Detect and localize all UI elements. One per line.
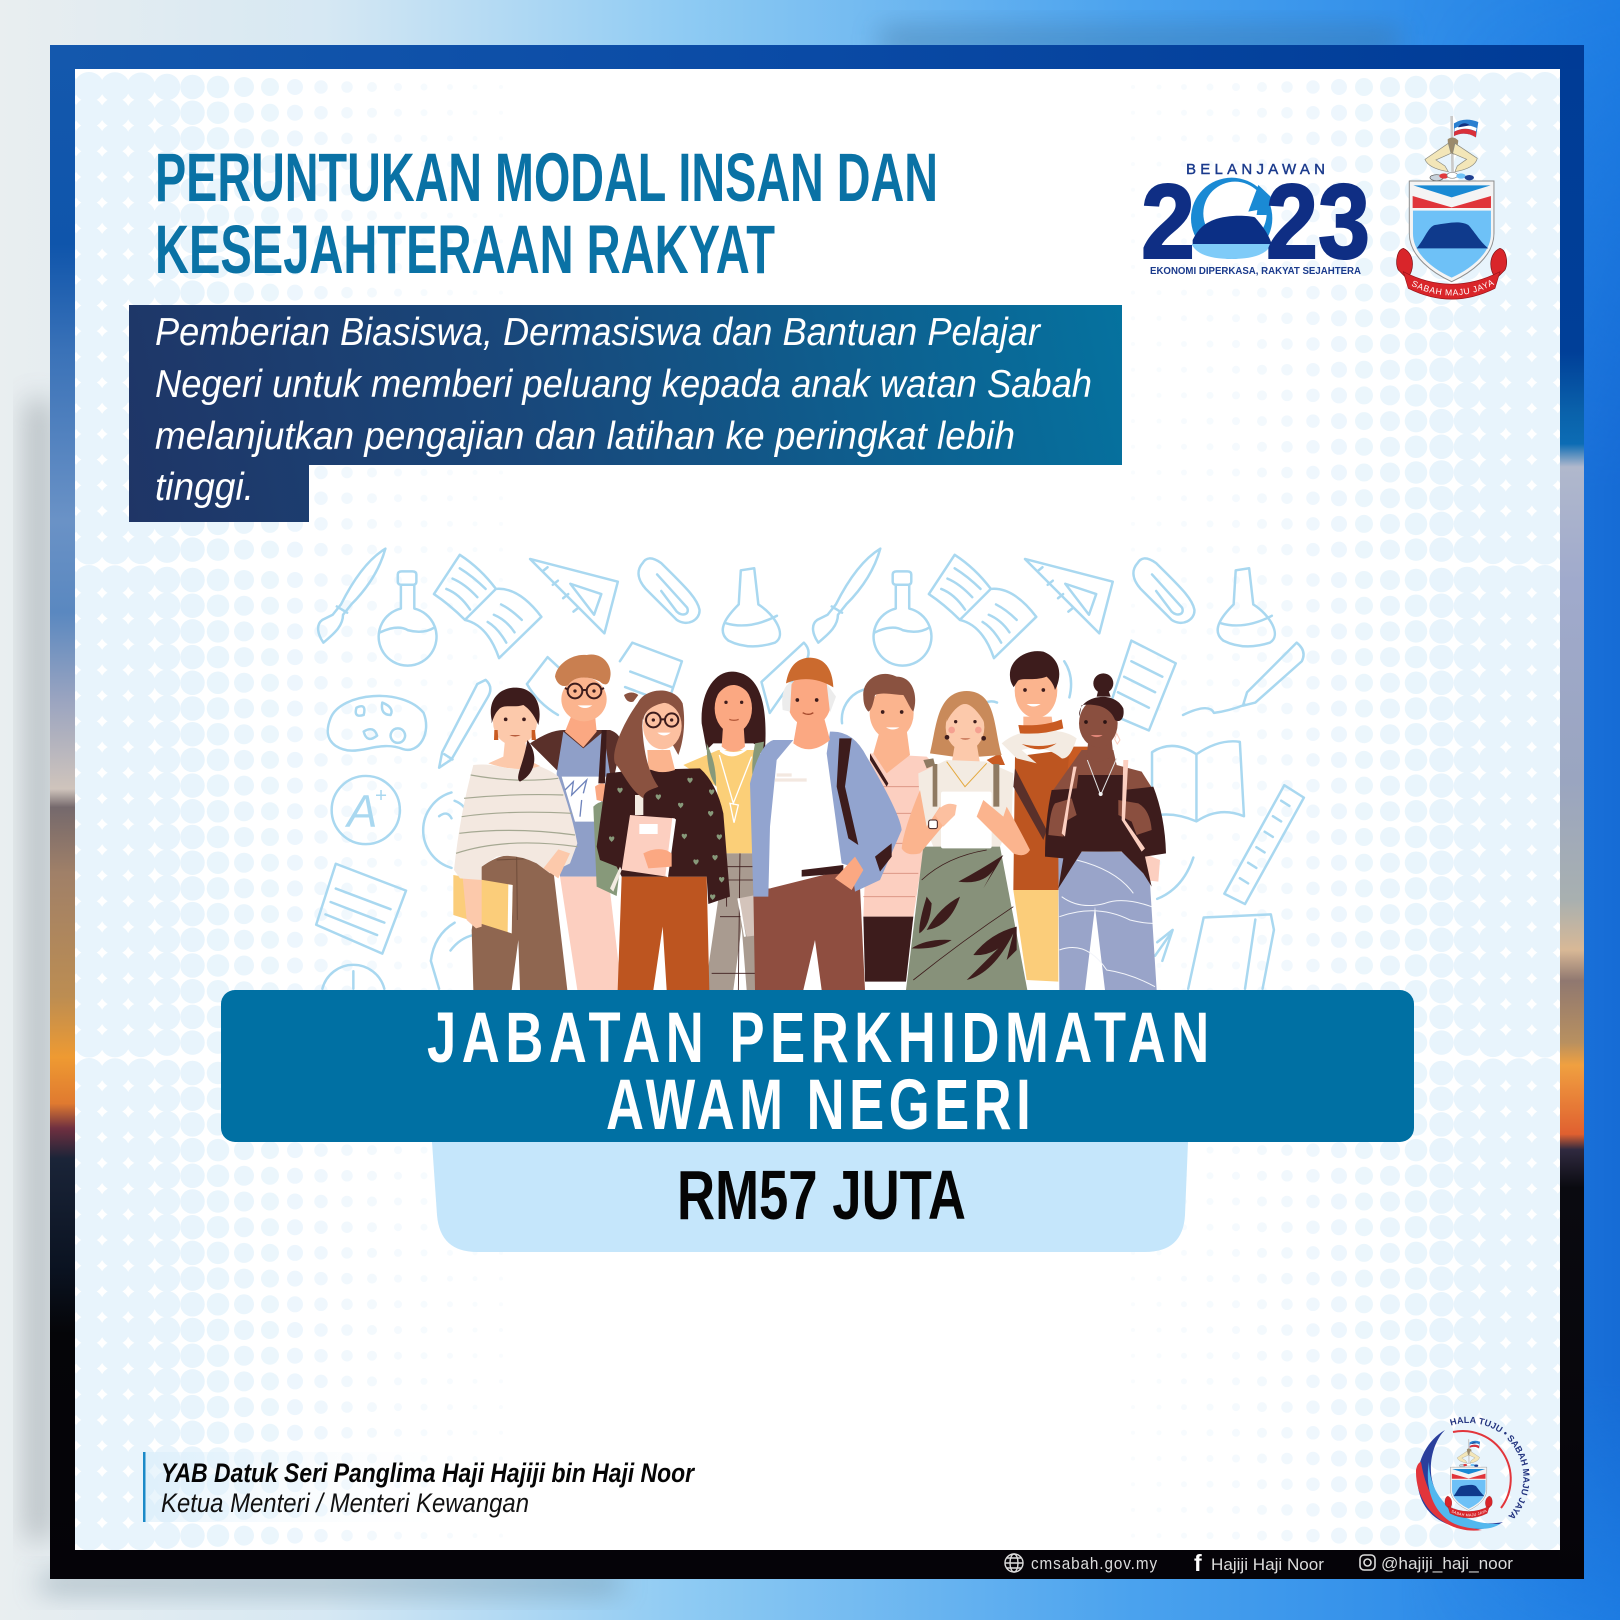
student: man with freckles: [863, 674, 935, 982]
title: PERUNTUKAN MODAL INSAN DAN: [155, 139, 938, 216]
social media footer: @hajiji_haji_noor: [1381, 1555, 1514, 1573]
student: man with orange hat: [750, 658, 902, 990]
students on the left: [453, 655, 775, 990]
student: woman with dark top: [1045, 673, 1166, 990]
description box: Pemberian Biasiswa, Dermasiswa dan Bantuan Pelajar: [155, 311, 1042, 354]
agency band: [221, 990, 1414, 1145]
title: [155, 139, 938, 288]
amount box: [432, 1142, 1188, 1252]
doodle background illustration: [316, 549, 1304, 989]
student: girl with glasses and book: [593, 690, 730, 990]
logo: Belanjawan 2023: BELANJAWAN: [1186, 161, 1325, 178]
doodle background illustration: +: [375, 784, 387, 807]
description box: tinggi.: [155, 466, 254, 509]
student: man with glasses: [530, 655, 622, 990]
amount box: RM57 JUTA: [677, 1156, 966, 1234]
social media footer: Hajiji Haji Noor: [1211, 1556, 1325, 1574]
attribution: YAB Datuk Seri Panglima Haji Hajiji bin Haji Noor: [161, 1458, 695, 1488]
students on the right: [750, 651, 1166, 990]
logo: Belanjawan 2023: 23: [1266, 163, 1370, 281]
title: KESEJAHTERAAN RAKYAT: [155, 211, 775, 288]
agency band: JABATAN PERKHIDMATAN: [427, 998, 1209, 1078]
social media footer: cmsabah.gov.my: [1031, 1555, 1158, 1573]
student: woman with green skirt: [902, 691, 1030, 990]
description box: melanjutkan pengajian dan latihan ke peringkat lebih: [155, 415, 1015, 458]
description box: Negeri untuk memberi peluang kepada anak watan Sabah: [155, 363, 1092, 406]
logo: Sabah coat of arms: [1397, 116, 1507, 299]
description box: [129, 305, 1122, 522]
logo: Hala Tuju Sabah Maju Jaya: [1416, 1416, 1530, 1531]
doodle background illustration: A: [344, 786, 377, 837]
logo: Belanjawan 2023: EKONOMI DIPERKASA, RAKYAT SEJAHTERA: [1150, 265, 1361, 277]
icon: instagram: [1360, 1555, 1375, 1570]
student: man with scarf: [987, 651, 1090, 982]
logo: Belanjawan 2023: [1141, 161, 1370, 281]
agency band: AWAM NEGERI: [606, 1065, 1031, 1145]
logo: Belanjawan 2023: 2: [1141, 163, 1195, 281]
student: woman with yellow top: [683, 672, 775, 990]
attribution: [143, 1452, 695, 1522]
logo: Hala Tuju Sabah Maju Jaya: HALA TUJU • SABAH MAJU JAYA: [1450, 1416, 1530, 1518]
student: woman with striped sweater: [453, 688, 577, 990]
icon: facebook: f: [1194, 1550, 1202, 1576]
illustration: group of students: [453, 651, 1166, 990]
attribution: Ketua Menteri / Menteri Kewangan: [161, 1488, 529, 1518]
icon: globe: [1005, 1554, 1023, 1572]
social media footer: [1005, 1550, 1514, 1576]
